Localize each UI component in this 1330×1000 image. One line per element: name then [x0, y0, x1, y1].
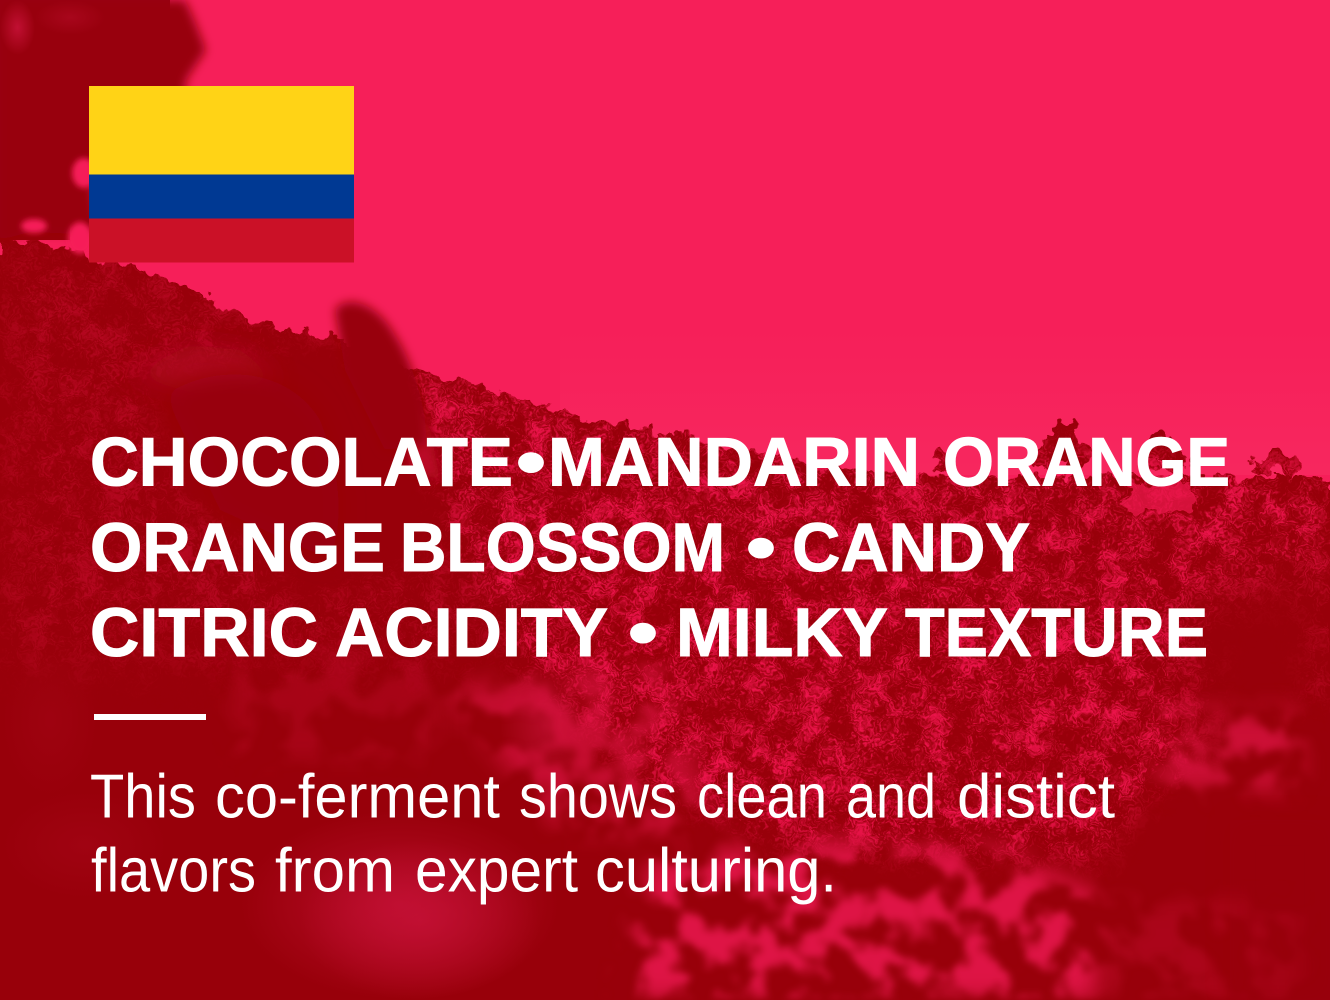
- lower-left glow: [240, 810, 560, 1000]
- heading: flavor notes: ORANGE: [943, 424, 1230, 500]
- heading: flavor notes: BLOSSOM: [400, 509, 725, 586]
- heading: flavor notes: MILKY: [676, 594, 888, 671]
- flag: red band: [89, 218, 354, 262]
- description text: co-ferment: [215, 762, 500, 832]
- heading: flavor notes: •: [746, 509, 776, 586]
- heading: flavor notes: •: [516, 424, 546, 500]
- background: hillside photo duotone: [0, 240, 1330, 873]
- description text: expert: [415, 836, 578, 906]
- heading: flavor notes: [90, 424, 1230, 671]
- heading: flavor notes: TEXTURE: [905, 594, 1208, 671]
- description text: and: [846, 762, 936, 832]
- description text: flavors: [91, 836, 256, 906]
- divider rule: [94, 714, 206, 720]
- right dark shadow: [1230, 820, 1330, 1000]
- heading: flavor notes: CITRIC: [90, 594, 318, 671]
- blurred smear beside the foreground leaf: [130, 345, 280, 395]
- description text: This: [90, 762, 196, 832]
- description text: from: [275, 836, 395, 906]
- flag: yellow band: [89, 86, 354, 174]
- blurred foreground foliage: [84, 322, 1312, 1000]
- top-left dark foliage: [0, 0, 426, 560]
- description text: [90, 762, 1115, 906]
- light blur top-left: [0, 0, 35, 55]
- heading: flavor notes: ORANGE: [90, 509, 385, 586]
- description text: shows: [519, 762, 677, 832]
- heading: flavor notes: ACIDITY: [335, 594, 608, 671]
- description text: culturing.: [595, 836, 837, 906]
- heading: flavor notes: CHOCOLATE: [90, 424, 513, 500]
- building on the hill: [1127, 484, 1192, 511]
- description text: distict: [957, 762, 1115, 832]
- heading: flavor notes: •: [628, 594, 658, 671]
- description text: clean: [697, 762, 827, 832]
- organic foliage blotches: [232, 652, 1312, 1000]
- background: hillside solid base: [0, 255, 1330, 1000]
- heading: flavor notes: MANDARIN: [548, 424, 920, 500]
- flag: blue band: [89, 174, 354, 218]
- sky gaps in foliage: [21, 219, 47, 233]
- flag of Colombia: [89, 86, 354, 262]
- dark foreground leaf over hill: [335, 302, 426, 450]
- heading: flavor notes: CANDY: [792, 509, 1030, 586]
- background: mist above horizon: [560, 330, 1330, 475]
